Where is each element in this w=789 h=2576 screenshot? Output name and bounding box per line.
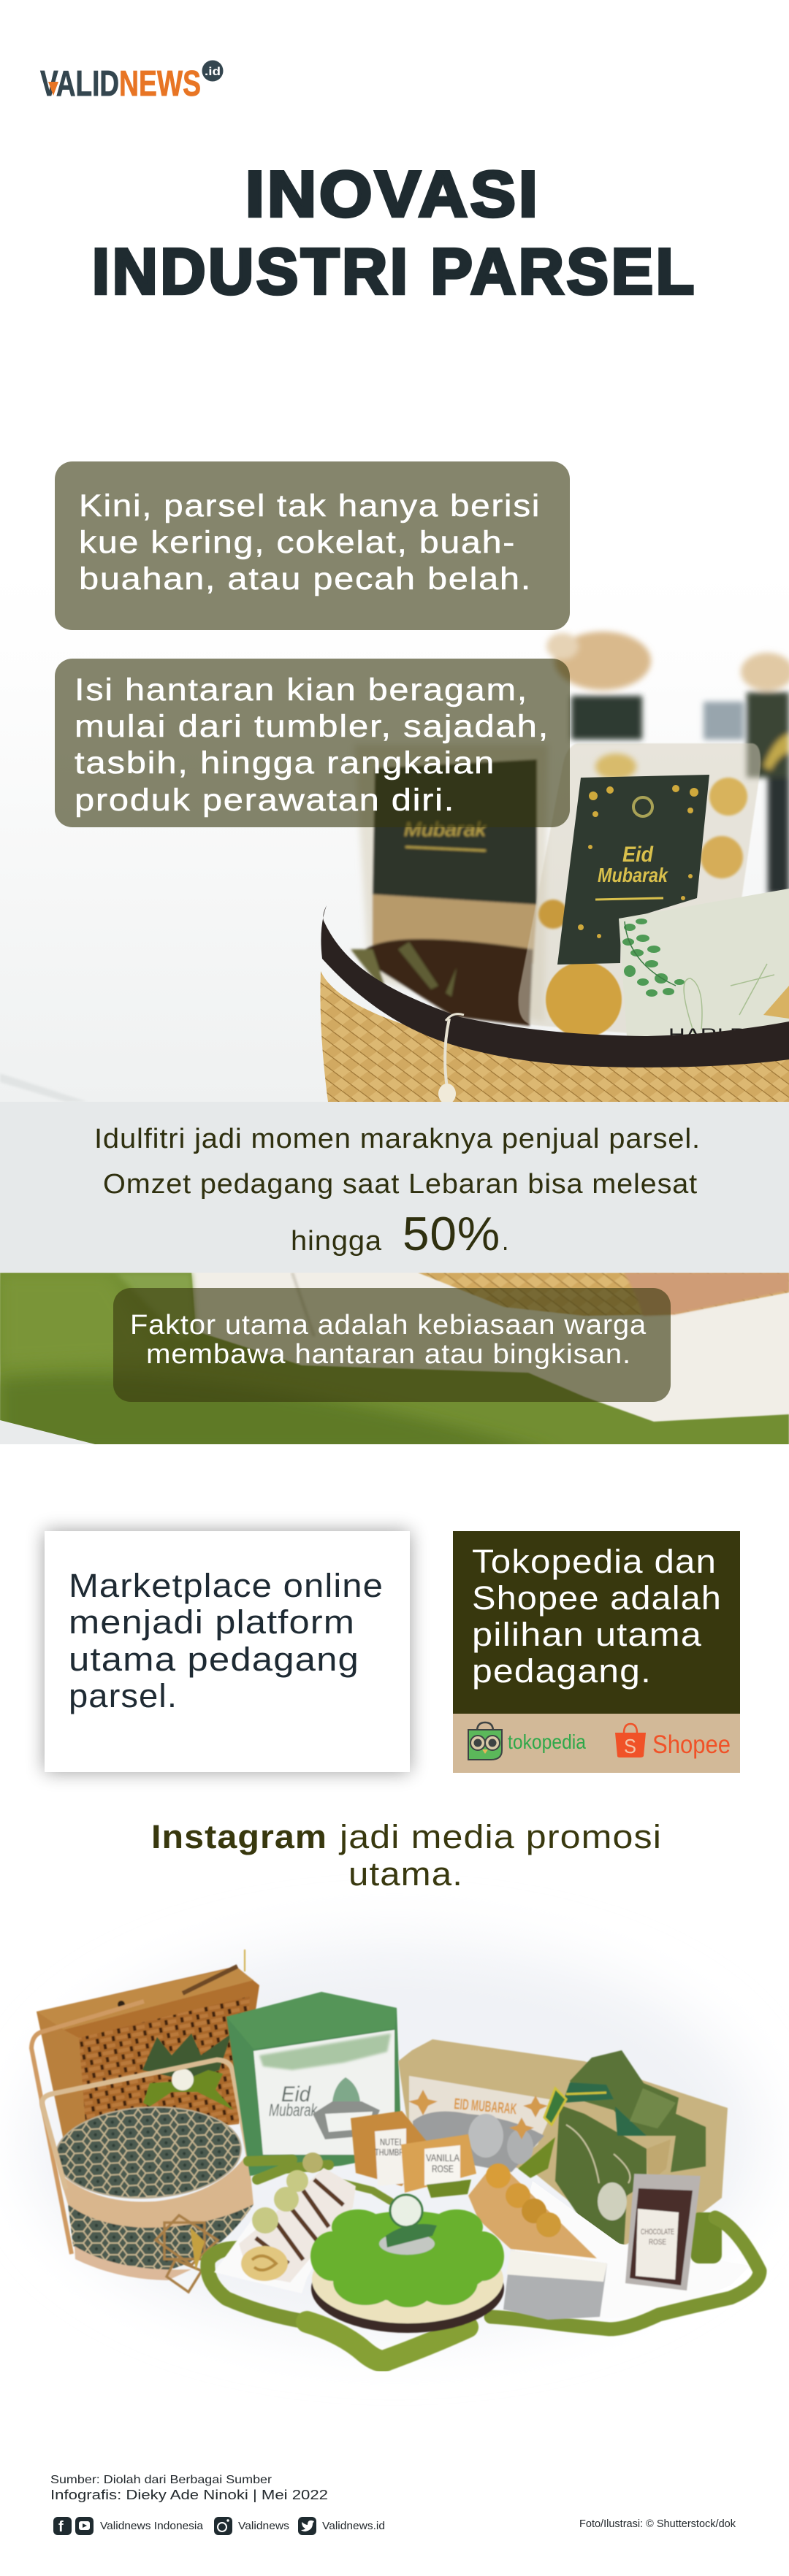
text box: faktor utama [113, 1288, 671, 1402]
label text: Eid Mubarak [598, 846, 668, 882]
logo: Shopee: S [624, 1735, 636, 1757]
icon: instagram [214, 2517, 232, 2535]
title: INDUSTRI PARSEL [92, 235, 697, 307]
icon: twitter [298, 2517, 316, 2535]
text: Instagram media promosi: Instagram [151, 1818, 327, 1855]
card: marketplace online: parsel. [69, 1677, 178, 1714]
text box: isi hantaran: tasbih, hingga rangkaian [75, 745, 495, 781]
card: marketplace online [45, 1531, 410, 1772]
greeting card [619, 889, 789, 1045]
green fabric wrap [518, 2050, 706, 2245]
text: Instagram media promosi: jadi media promosi [338, 1818, 662, 1855]
text box: isi hantaran: produk perawatan diri. [75, 783, 455, 818]
cookie jars: NUTEL [380, 2136, 403, 2147]
kraft gift box: EID MUBARAK [454, 2096, 517, 2117]
text box: isi hantaran: mulai dari tumbler, sajadah, [75, 709, 549, 744]
photo: parcel collection [29, 1942, 760, 2361]
green gift box [226, 1992, 402, 2176]
social links: Validnews [238, 2521, 289, 2532]
pandan pudding [310, 2195, 504, 2333]
jar [351, 745, 548, 1026]
nastar cake [468, 2163, 597, 2258]
social links: Validnews Indonesia [100, 2521, 204, 2532]
text box: faktor utama: Faktor utama adalah kebiasaan warga [130, 1310, 647, 1341]
footer credits: Foto/Ilustrasi: © Shutterstock/dok [579, 2518, 736, 2530]
white paper [511, 2181, 750, 2322]
green ribbon [207, 2160, 760, 2361]
stat band: omzet 50%: . [502, 1226, 509, 1257]
logo: Validnews.id: VALID [40, 64, 119, 104]
chocolate pack [625, 2174, 701, 2291]
round woven basket [42, 2060, 254, 2292]
text: Instagram media promosi: utama. [348, 1855, 463, 1893]
cookie jars: THUMBR [375, 2147, 404, 2158]
icon: facebook [53, 2517, 72, 2535]
card: Tokopedia dan Shopee: pedagang. [472, 1652, 652, 1690]
logo: Tokopedia: tokopedia [508, 1730, 586, 1753]
stat band: omzet 50%: Omzet pedagang saat Lebaran bisa melesat [103, 1169, 698, 1200]
stat band: omzet 50%: 50% [403, 1207, 500, 1260]
kraft gift box [398, 2039, 728, 2245]
stat band: omzet 50%: hingga [291, 1226, 382, 1257]
card: Tokopedia dan Shopee: pilihan utama [472, 1616, 702, 1653]
logo: Validnews.id [40, 60, 224, 104]
title [92, 158, 697, 307]
cookie jars [351, 2111, 476, 2198]
jar: Mubarak [404, 818, 487, 840]
chocolate pack: CHOCOLATE [641, 2228, 674, 2236]
social links: Validnews.id [322, 2521, 385, 2532]
card: Tokopedia dan Shopee [453, 1531, 740, 1773]
green gift box: Eid [281, 2082, 311, 2107]
footer credits: Infografis: Dieky Ade Ninoki | Mei 2022 [50, 2487, 328, 2502]
photo: green cloth and marble [0, 1273, 789, 1453]
text: Instagram media promosi [151, 1818, 662, 1893]
text box: isi parsel: buahan, atau pecah belah. [79, 561, 532, 597]
text box: isi parsel: kue kering, cokelat, buah- [79, 525, 516, 560]
icon: facebook: f [58, 2519, 64, 2535]
text box: faktor utama: membawa hantaran atau bingkisan. [146, 1339, 631, 1370]
card: Tokopedia dan Shopee: Shopee adalah [472, 1579, 722, 1617]
footer credits: Sumber: Diolah dari Berbagai Sumber [50, 2474, 272, 2486]
stat band: omzet 50%: Idulfitri jadi momen maraknya penjual parsel. [94, 1124, 701, 1154]
card: Tokopedia dan Shopee: Tokopedia dan [472, 1543, 717, 1580]
card: marketplace online: menjadi platform [69, 1603, 355, 1641]
label text: Eid Mubarak: Eid [622, 843, 654, 867]
text box: isi hantaran [55, 659, 570, 827]
card: marketplace online: utama pedagang [69, 1641, 359, 1678]
chocolate pack: ROSE [649, 2238, 666, 2247]
greeting card: HARI RAYA [668, 1025, 789, 1045]
text box: isi parsel [55, 461, 570, 630]
roll cake [214, 2153, 356, 2293]
logo: Shopee [615, 1724, 731, 1759]
text box: isi hantaran: Isi hantaran kian beragam, [75, 672, 528, 708]
green gift box: Mubarak [269, 2101, 318, 2120]
blurred cookies behind [546, 632, 789, 894]
photo: parcel basket with cookies [0, 627, 789, 1102]
clear cookie box [518, 743, 761, 1038]
icon: youtube [75, 2517, 94, 2535]
card: marketplace online: Marketplace online [69, 1567, 384, 1604]
bamboo box [31, 1950, 259, 2254]
logo: Shopee: Shopee [652, 1730, 731, 1759]
logo: Validnews.id: .id [205, 66, 221, 78]
title: INOVASI [245, 158, 541, 230]
social links [53, 2517, 385, 2535]
cookie jars: ROSE [432, 2163, 454, 2174]
label text: Eid Mubarak: Mubarak [598, 864, 668, 886]
rim + wicker [320, 971, 789, 1102]
logo: Validnews.id: NEWS [119, 64, 201, 104]
leaf bow [142, 2033, 234, 2110]
logo: Tokopedia [468, 1722, 586, 1760]
text box: isi parsel: Kini, parsel tak hanya berisi [79, 488, 541, 524]
cookie jars: VANILLA [426, 2152, 460, 2163]
stat band: omzet 50% [0, 1102, 789, 1273]
footer credits [50, 2474, 736, 2530]
note card [503, 2250, 607, 2320]
